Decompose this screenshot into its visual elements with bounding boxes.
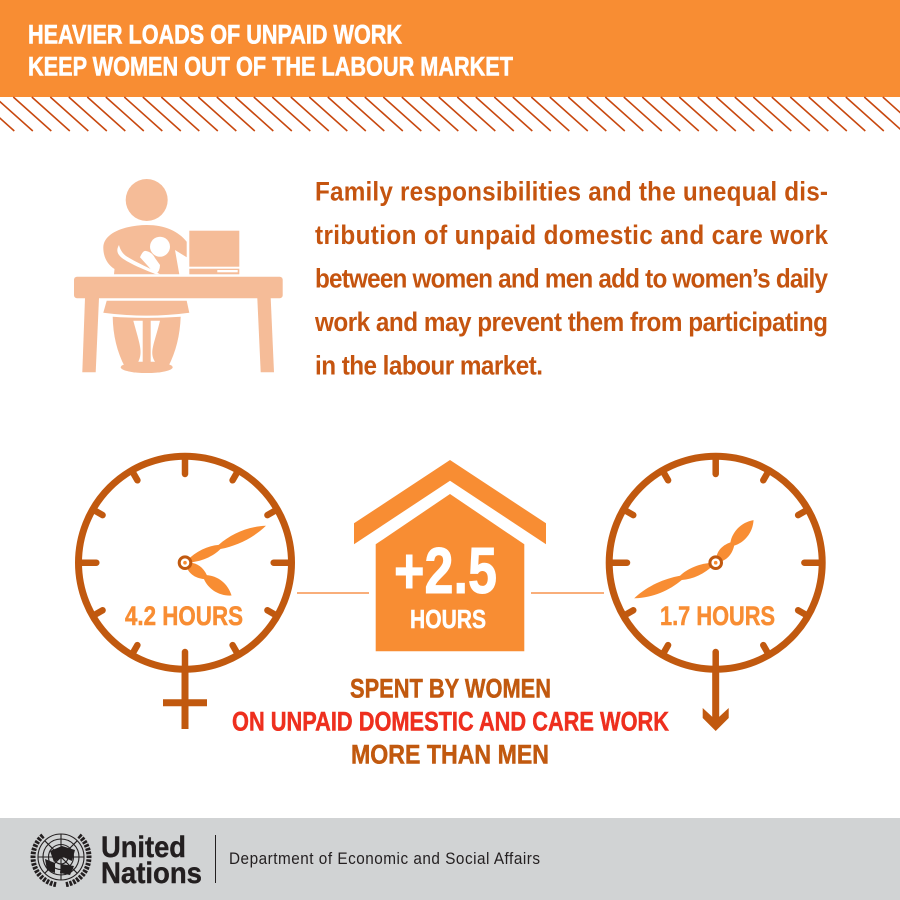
intro paragraph: tribution of unpaid domestic and care work — [315, 221, 829, 250]
caption — [232, 674, 669, 769]
label: hours: HOURS — [410, 604, 486, 634]
title: KEEP WOMEN OUT OF THE LABOUR MARKET — [28, 52, 513, 82]
connector line: house to right clock — [531, 592, 604, 594]
connector line: left clock to house — [297, 592, 369, 594]
title — [28, 20, 513, 82]
logo text: United Nations — [101, 831, 202, 890]
label: 4.2 hours: 4.2 HOURS — [125, 601, 243, 631]
intro paragraph: Family responsibilities and the unequal dis- — [315, 177, 828, 207]
caption: ON UNPAID DOMESTIC AND CARE WORK — [232, 707, 669, 737]
clock with male symbol: 1.7 hours — [609, 456, 822, 731]
intro paragraph: in the labour market. — [315, 351, 543, 381]
department name: Department of Economic and Social Affairs — [229, 849, 540, 868]
logo text: United Nations: Nations — [101, 857, 202, 890]
caption: MORE THAN MEN — [351, 739, 549, 769]
icon: UN emblem — [33, 834, 89, 885]
title: HEAVIER LOADS OF UNPAID WORK — [28, 20, 402, 50]
icon: woman holding a baby at a desk with a laptop — [74, 179, 283, 373]
clock hands — [183, 521, 268, 601]
footer band — [0, 818, 900, 900]
icon: house with +2.5 hours — [354, 460, 546, 651]
logo text: United Nations: United — [101, 831, 186, 864]
label: 1.7 hours: 1.7 HOURS — [660, 601, 775, 631]
caption: SPENT BY WOMEN — [350, 674, 551, 704]
intro paragraph: work and may prevent them from participating — [314, 308, 828, 337]
clock with female symbol: 4.2 hours — [78, 456, 292, 729]
value: +2.5: +2.5 — [394, 534, 497, 607]
intro paragraph: between women and men add to women’s daily — [315, 264, 829, 294]
header banner — [0, 0, 900, 97]
intro paragraph — [314, 177, 829, 381]
clock hands — [632, 516, 758, 603]
